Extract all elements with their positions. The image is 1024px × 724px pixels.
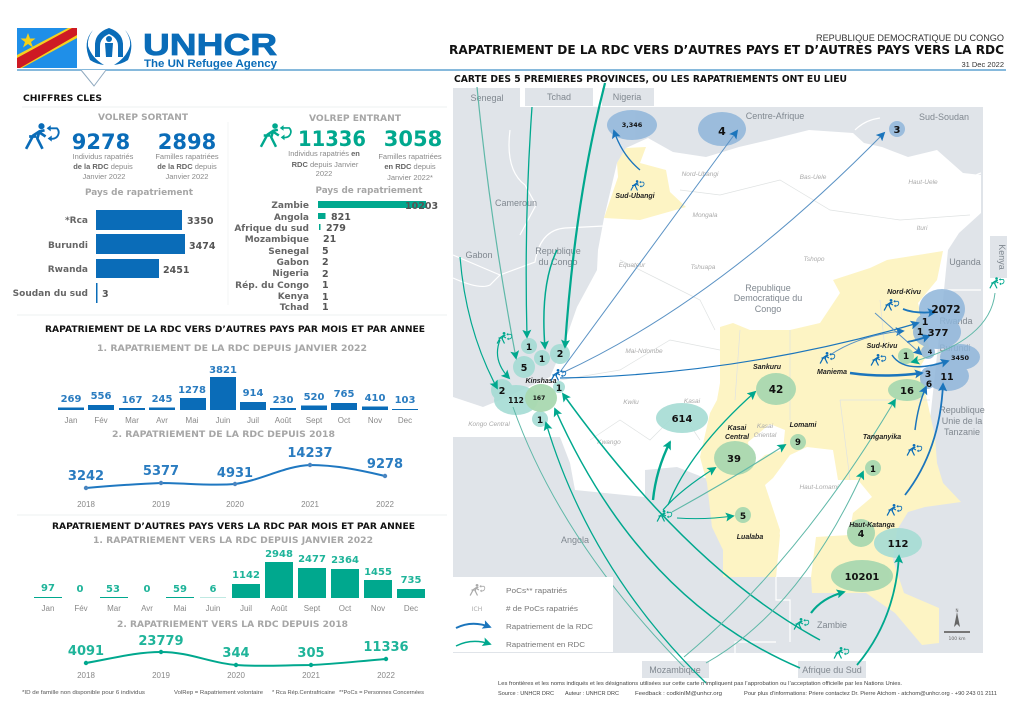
map: runner icons [497, 180, 1004, 659]
bar chart: incoming by country: 2 [322, 269, 329, 280]
map: grey country labels: Unie de la [942, 416, 982, 426]
bar chart: monthly returns from DRC: 230 [273, 395, 293, 406]
bar chart: monthly returns from DRC: Oct [338, 416, 351, 425]
bar chart: monthly returns to DRC: 2364 [331, 555, 359, 566]
line chart: yearly returns from DRC: 2022 [376, 500, 394, 509]
legend labels: Rapatriement de la RDC [506, 622, 594, 631]
map: grey country labels: Cameroun [495, 198, 537, 208]
map: repatriation arrows from DRC [560, 131, 948, 495]
heading: volrep sortant: VOLREP SORTANT [98, 113, 189, 123]
bar chart: monthly returns from DRC: 410 [365, 393, 385, 404]
map footer: disclaimer and source [498, 681, 997, 697]
map: grey country labels: Gabon [465, 250, 493, 260]
map: grey province labels: Kongo Central [468, 421, 510, 428]
map: grey country labels: Uganda [949, 257, 981, 267]
map: grey country labels: Centre-Afrique [746, 111, 804, 121]
line chart: yearly returns from DRC: 9278 [367, 457, 403, 472]
bar chart: monthly returns to DRC: 97 [41, 583, 55, 594]
map: grey province labels: Kasai [684, 398, 701, 405]
map: bubble values: 4 [858, 529, 865, 540]
stat: individuals: Individus rapatriés [73, 152, 134, 161]
map: bubble values: 112 [508, 396, 524, 405]
map: province names: Kinshasa [525, 378, 557, 385]
map: grey country labels: Zambie [817, 620, 847, 630]
stat: individuals [72, 130, 134, 181]
map: grey province labels: Haut-Uele [908, 179, 938, 186]
map: grey province labels: Bas-Uele [800, 174, 827, 181]
icon: incoming runner [261, 123, 291, 147]
map: bubble values: 614 [672, 414, 692, 425]
bar chart: outgoing by country: 3474 [189, 241, 216, 252]
map: grey country labels: du Congo [538, 257, 578, 267]
map: grey province labels: Ituri [917, 225, 928, 232]
bar chart: incoming by country: 279 [326, 223, 346, 234]
map: bubble values: 167 [533, 395, 545, 402]
icon: outgoing runner [26, 123, 59, 149]
footnotes: * Rca Rép.Centrafricaine [272, 690, 335, 696]
header: UNHCR wordmark: The UN Refugee Agency [144, 58, 278, 70]
bar chart: incoming by country: Angola [274, 213, 309, 223]
bar chart: monthly returns to DRC: 1455 [364, 567, 392, 578]
stat: families: en RDC depuis [384, 162, 436, 171]
line chart: yearly returns to DRC: 2019 [152, 671, 170, 680]
bar chart: monthly returns from DRC: Juin [216, 416, 230, 425]
date: 31 Dec 2022 [961, 60, 1004, 69]
map: bubble values: 3,346 [622, 121, 643, 129]
map: grey province labels: Tshopo [803, 256, 825, 263]
map: province names: Lomami [790, 422, 817, 429]
map: bubble values: 10201 [845, 572, 879, 583]
map: grey province labels: Oriental [754, 432, 777, 439]
stat: individuals: 9278 [72, 130, 130, 154]
map tabs: neighbouring countries: Mozambique [649, 665, 701, 675]
map: province names: Lualaba [737, 534, 763, 541]
map tabs: neighbouring countries [453, 88, 1007, 678]
map: grey province labels: Mongala [693, 212, 718, 219]
legend labels: Rapatriement en RDC [506, 640, 586, 649]
bar chart: incoming by country: Tchad [280, 303, 309, 313]
map: bubble values: 1 [870, 465, 876, 475]
map footer: disclaimer and source: Source : UNHCR DRC [498, 691, 554, 697]
map: bubble values: 4 [928, 348, 933, 356]
map: bubble values: 4 [718, 125, 726, 138]
bar chart: incoming by country: Kenya [278, 292, 309, 302]
bar chart: monthly returns to DRC: Mai [174, 604, 187, 613]
stat: families: Janvier 2022* [387, 173, 433, 182]
map tabs: neighbouring countries: Afrique du Sud [802, 665, 862, 675]
map: province names: Sud-Kivu [867, 343, 898, 350]
map: grey country labels: Tanzanie [944, 427, 980, 437]
bar chart: monthly returns to DRC: 59 [173, 584, 187, 595]
map: bubble values: 377 [928, 328, 948, 339]
map: province names: Sud-Ubangi [615, 193, 656, 200]
heading: RAPATRIEMENT D’AUTRES PAYS VERS LA RDC PAR MOIS ET PAR ANNEE [52, 522, 415, 532]
map: province names: Kasai [728, 425, 747, 432]
stat: individuals: 11336 [298, 127, 366, 151]
bar chart: monthly returns from DRC: Mar [125, 416, 139, 425]
map: grey province labels [468, 171, 938, 491]
footnotes: VolRep = Rapatriement volontaire [174, 690, 263, 696]
subheading: yearly: 2. RAPATRIEMENT VERS LA RDC DEPUIS 2018 [117, 620, 348, 630]
map: grey country labels: Congo [755, 304, 781, 314]
map: north arrow and scale [944, 608, 970, 642]
map: grey country labels [465, 111, 985, 630]
map footer: disclaimer and source: Les frontières et les noms indiqués et les désignations utilisées sur cette carte n’impliquent pas l’approbation ou l’acceptation officielle par les Nations Unies. [498, 681, 902, 687]
bar chart: incoming by country: 1 [322, 302, 329, 313]
bar chart: incoming by country: 1 [322, 292, 329, 303]
bar chart: monthly returns to DRC: 0 [144, 584, 151, 595]
stat: individuals [288, 127, 366, 178]
bar chart: monthly returns from DRC: 269 [61, 394, 81, 405]
map: bubble values [499, 121, 970, 583]
header: flag of DR Congo [17, 28, 77, 68]
heading: RAPATRIEMENT DE LA RDC VERS D’AUTRES PAYS PAR MOIS ET PAR ANNEE [45, 325, 425, 335]
map: bubble values: 1 [903, 352, 909, 362]
heading: key figures: CHIFFRES CLES [23, 94, 102, 104]
bar chart: incoming by country: Zambie [271, 201, 309, 211]
line chart: yearly returns from DRC: 2018 [77, 500, 95, 509]
map: grey province labels: Nord-Ubangi [682, 171, 719, 178]
bar chart: incoming by country: 2 [322, 257, 329, 268]
map: white provinces inside highlighted area [748, 424, 872, 577]
bar chart: outgoing by country: 3350 [187, 216, 214, 227]
bar chart: incoming by country: Rép. du Congo [235, 280, 309, 291]
bar chart: monthly returns to DRC: Mar [107, 604, 121, 613]
stat: families: Janvier 2022 [166, 172, 208, 181]
line chart: yearly returns to DRC: 305 [297, 646, 325, 661]
map: bubble values: 3 [925, 370, 931, 380]
bar chart: monthly returns from DRC: Jan [65, 416, 77, 425]
map: bubble values: 1 [556, 384, 562, 394]
map footer: disclaimer and source: Auteur : UNHCR DRC [565, 691, 619, 697]
map: grey country labels: Angola [561, 535, 589, 545]
bar chart: monthly returns to DRC: Nov [371, 604, 385, 613]
map tabs: neighbouring countries: Kenya [997, 244, 1007, 270]
map: bubble values: 16 [900, 386, 914, 397]
line chart: yearly returns from DRC: 14237 [287, 446, 333, 461]
bar chart: monthly returns to DRC: Dec [404, 604, 418, 613]
footnotes [22, 690, 425, 696]
line chart: yearly returns to DRC [68, 634, 409, 680]
map footer: disclaimer and source: Feedback : codkinIM@unhcr.org [635, 691, 722, 697]
bar chart: incoming by country: 21 [323, 234, 336, 245]
map: grey country labels: Republique [535, 246, 581, 256]
map: bubble values: 2 [499, 386, 505, 397]
stat: individuals: Individus rapatriés en [288, 149, 360, 158]
line chart: yearly returns to DRC: 23779 [138, 634, 184, 649]
map: highlighted eastern and southern provinces [700, 251, 961, 645]
stat: families: Familles rapatriées [155, 152, 219, 161]
bar chart: monthly returns to DRC: Juil [240, 604, 252, 613]
map: bubble values: 1 [539, 355, 545, 365]
map: grey province labels: Kasai [757, 423, 774, 430]
header: UNHCR emblem [87, 28, 131, 65]
legend labels: # de PoCs rapatriés [506, 604, 578, 613]
subheading: yearly: 2. RAPATRIEMENT DE LA RDC DEPUIS 2018 [112, 430, 335, 440]
section: returns to DRC [34, 522, 425, 680]
map: grey country labels: Rwanda [939, 316, 973, 326]
stat: families [155, 130, 219, 181]
line chart: yearly returns to DRC: 2018 [77, 671, 95, 680]
footnotes: *ID de famille non disponible pour 6 individus [22, 690, 146, 696]
map: north arrow and scale: 100 km [948, 636, 966, 642]
map: grey province labels: Kwilu [623, 399, 639, 406]
bar chart: incoming by country: Gabon [276, 258, 309, 268]
map: grey country labels: Burundi [939, 343, 971, 353]
bar chart: monthly returns to DRC [34, 549, 425, 613]
map: bubble values: 2 [557, 349, 563, 360]
bar chart: monthly returns from DRC: 245 [152, 394, 172, 405]
map: province names: Central [725, 434, 750, 441]
bar chart: outgoing by country [13, 210, 216, 303]
map: bubble values: 42 [769, 384, 783, 396]
map: bubble values: 39 [727, 454, 741, 465]
map: base geography [453, 107, 983, 653]
heading: country name: REPUBLIQUE DEMOCRATIQUE DU CONGO [816, 33, 1004, 44]
legend labels [506, 586, 594, 649]
stat: families: 3058 [384, 127, 442, 151]
map: bubble values: 3450 [951, 354, 970, 362]
stat: families [378, 127, 442, 182]
map: DRC territory [453, 130, 981, 527]
legend icon: count: ICH [472, 606, 482, 613]
bar chart: monthly returns to DRC: 6 [210, 584, 217, 595]
bar chart: incoming by country: 10203 [405, 201, 438, 212]
header: UNHCR wordmark [143, 27, 278, 70]
stat: families: 2898 [158, 130, 216, 154]
map: grey country labels: Sud-Soudan [919, 112, 969, 122]
subheading: monthly: 1. RAPATRIEMENT VERS LA RDC DEPUIS JANVIER 2022 [93, 536, 373, 546]
map: origin and destination bubbles [491, 110, 980, 592]
stat: individuals: de la RDC depuis [73, 162, 133, 171]
bar chart: monthly returns from DRC: Août [275, 416, 292, 425]
map: north arrow and scale: N [956, 608, 958, 613]
line chart: yearly returns to DRC: 2021 [302, 671, 320, 680]
stat: families: de la RDC depuis [157, 162, 217, 171]
map heading: CARTE DES 5 PREMIERES PROVINCES, OU LES RAPATRIEMENTS ONT EU LIEU [454, 74, 847, 85]
map: grey country labels: Republique [745, 283, 791, 293]
heading: countries of return: Pays de rapatriement [316, 186, 423, 196]
bar chart: incoming by country: Mozambique [245, 235, 309, 245]
map: grey country labels: Democratique du [734, 293, 802, 303]
stat: individuals: RDC depuis Janvier [292, 160, 359, 169]
main title: RAPATRIEMENT DE LA RDC VERS D’AUTRES PAYS ET D’AUTRES PAYS VERS LA RDC [449, 42, 1004, 57]
bar chart: monthly returns from DRC: 3821 [209, 365, 237, 376]
heading: countries of return: Pays de rapatriement [85, 188, 194, 198]
map: grey province labels: Mai-Ndombe [625, 348, 663, 355]
line chart: yearly returns to DRC: 11336 [363, 640, 409, 655]
map: grey province labels: Equateur [619, 262, 646, 269]
map: grey country labels: Republique [939, 405, 985, 415]
subheading: monthly: 1. RAPATRIEMENT DE LA RDC DEPUIS JANVIER 2022 [97, 344, 367, 354]
map tabs: neighbouring countries: Senegal [470, 93, 504, 103]
bar chart: monthly returns to DRC: Jan [42, 604, 54, 613]
legend arrow: from DRC [456, 624, 490, 628]
bar chart: monthly returns from DRC: 914 [243, 388, 263, 399]
map: province names: Sankuru [753, 364, 782, 371]
header rule with pointer [17, 70, 1006, 86]
map: province names: Tanganyika [863, 434, 901, 441]
line chart: yearly returns to DRC: 2020 [227, 671, 245, 680]
map: bubble values: 2072 [931, 304, 961, 316]
bar chart: outgoing by country: 3 [102, 289, 109, 300]
legend arrow: to DRC [456, 641, 490, 646]
bar chart: monthly returns from DRC: Avr [156, 416, 168, 425]
map: bubble values: 5 [740, 512, 746, 522]
bar chart: monthly returns to DRC: Août [271, 604, 288, 613]
bar chart: incoming by country: 1 [322, 280, 329, 291]
bar chart: monthly returns to DRC: Sept [304, 604, 321, 613]
heading: volrep entrant: VOLREP ENTRANT [309, 114, 402, 124]
line chart: yearly returns to DRC: 4091 [68, 644, 104, 659]
bar chart: outgoing by country: Burundi [48, 241, 88, 251]
bar chart: incoming by country: Senegal [268, 247, 309, 257]
bar chart: monthly returns to DRC: Juin [206, 604, 220, 613]
line chart: yearly returns to DRC: 2022 [377, 671, 395, 680]
map: province names: Nord-Kivu [887, 289, 922, 296]
map tabs: neighbouring countries: Tchad [547, 92, 571, 102]
bar chart: monthly returns from DRC: Mai [186, 416, 199, 425]
map: bubble values: 1 [537, 416, 543, 426]
bar chart: outgoing by country: Soudan du sud [13, 289, 88, 299]
bar chart: monthly returns to DRC: 2477 [298, 554, 326, 565]
bar chart: monthly returns to DRC: 2948 [265, 549, 293, 560]
map: bubble values: 6 [926, 380, 932, 390]
line chart: yearly returns from DRC: 2019 [152, 500, 170, 509]
bar chart: monthly returns to DRC: Avr [141, 604, 153, 613]
bar chart: incoming by country [234, 201, 438, 313]
line chart: yearly returns from DRC [68, 446, 403, 509]
bar chart: outgoing by country: *Rca [65, 216, 88, 226]
map: province names: Haut-Katanga [849, 522, 895, 529]
bar chart: monthly returns from DRC: Nov [368, 416, 382, 425]
bar chart: outgoing by country: Rwanda [48, 265, 88, 275]
line chart: yearly returns from DRC: 2021 [301, 500, 319, 509]
bar chart: monthly returns to DRC: Fév [74, 604, 88, 613]
map tabs: neighbouring countries: Nigeria [613, 92, 641, 102]
bar chart: monthly returns to DRC: 0 [77, 584, 84, 595]
map: repatriation arrows into DRC [460, 83, 995, 683]
line chart: yearly returns to DRC: 344 [222, 646, 250, 661]
stat: families: Familles rapatriées [378, 152, 442, 161]
bar chart: monthly returns from DRC: 765 [334, 389, 354, 400]
stat: individuals: 2022 [316, 169, 332, 178]
map: bubble values: 1 [526, 343, 532, 353]
map: bubble values: 1 [922, 317, 928, 328]
bar chart: monthly returns from DRC: 103 [395, 395, 415, 406]
panel: outgoing volrep [13, 113, 219, 303]
map: bubble values: 11 [940, 372, 954, 383]
bar chart: monthly returns to DRC: 1142 [232, 570, 260, 581]
map: bubble values: 5 [521, 363, 527, 374]
bar chart: monthly returns from DRC: Juil [247, 416, 259, 425]
section: returns from DRC [45, 325, 425, 509]
map: province names [525, 193, 922, 541]
map: grey province labels: Tshuapa [691, 264, 716, 271]
header: UNHCR wordmark: UNHCR [143, 27, 277, 62]
panel: incoming volrep [234, 114, 442, 313]
bar chart: monthly returns from DRC: 520 [304, 392, 324, 403]
bar chart: incoming by country: Afrique du sud [234, 224, 309, 234]
bar chart: monthly returns from DRC [58, 365, 418, 425]
map: bubble values: 1 [917, 327, 923, 338]
bar chart: monthly returns from DRC: Dec [398, 416, 412, 425]
stat: individuals: Janvier 2022 [83, 172, 125, 181]
map legend [453, 577, 613, 652]
map: highlighted province Sud-Ubangi [604, 147, 686, 220]
bar chart: incoming by country: 821 [331, 212, 351, 223]
legend icon: returnees [470, 584, 485, 596]
footnotes: **PoCs = Personnes Concernées [339, 690, 425, 696]
line chart: yearly returns from DRC: 4931 [217, 466, 253, 481]
map: bubble values: 112 [888, 539, 908, 550]
map: grey province labels: Haut-Lomami [799, 484, 839, 491]
map: bubble values: 9 [795, 438, 801, 448]
map: province names: Maniema [817, 369, 847, 376]
bar chart: outgoing by country: 2451 [163, 265, 189, 276]
bar chart: monthly returns to DRC: Oct [339, 604, 352, 613]
bar chart: monthly returns from DRC: Sept [306, 416, 323, 425]
bar chart: monthly returns to DRC: 735 [401, 575, 421, 586]
bar chart: incoming by country: Nigeria [272, 269, 309, 279]
line chart: yearly returns from DRC: 5377 [143, 464, 179, 479]
bar chart: monthly returns to DRC: 53 [106, 584, 120, 595]
map footer: disclaimer and source: Pour plus d’informations: Priere contactez Dr. Pierre Atchom - atchom@unhcr.org - +90 243 01 2111 [744, 691, 997, 697]
bar chart: monthly returns from DRC: 167 [122, 395, 142, 406]
line chart: yearly returns from DRC: 3242 [68, 469, 104, 484]
bar chart: monthly returns from DRC: 556 [91, 391, 111, 402]
map: bubble values: 3 [894, 125, 901, 136]
line chart: yearly returns from DRC: 2020 [226, 500, 244, 509]
bar chart: monthly returns from DRC: 1278 [178, 385, 206, 396]
bar chart: monthly returns from DRC: Fév [94, 416, 108, 425]
bar chart: incoming by country: 5 [322, 246, 329, 257]
legend labels: PoCs** rapatriés [506, 586, 567, 595]
map: grey province labels: Kwango [597, 439, 621, 446]
